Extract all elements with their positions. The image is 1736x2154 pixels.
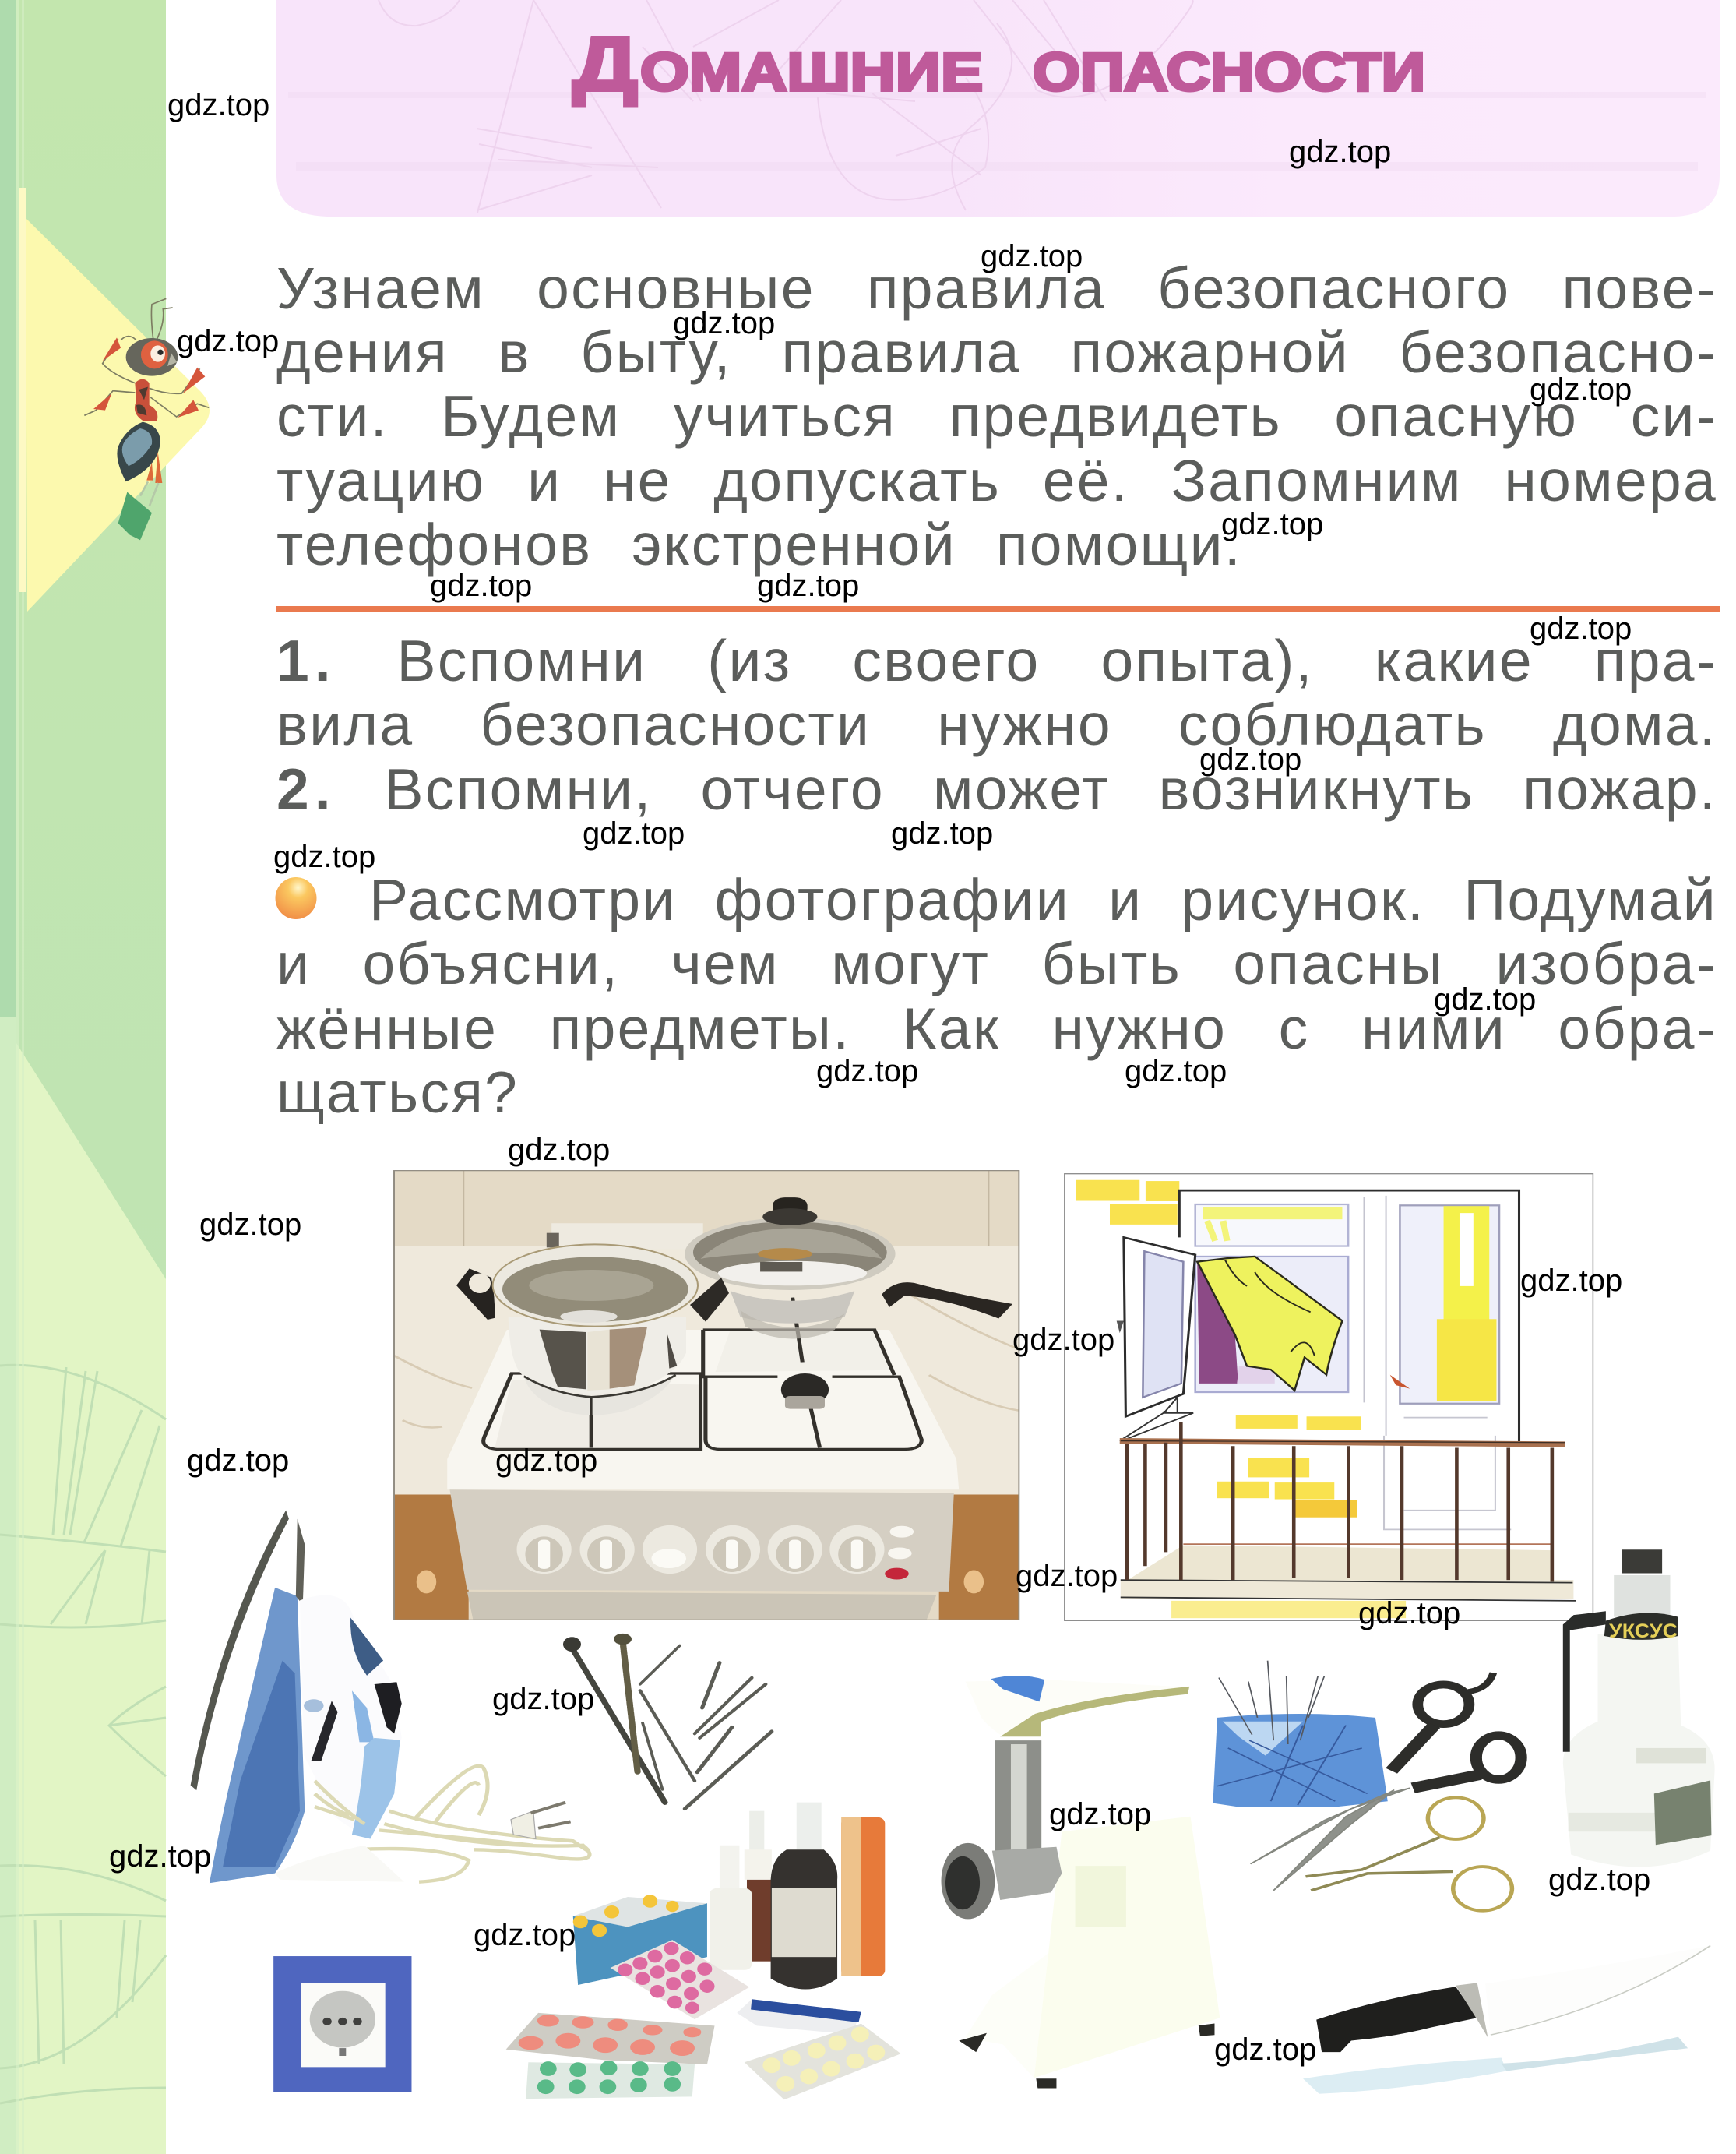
watermarks: gdz.top — [1548, 1863, 1650, 1897]
watermarks: gdz.top — [1016, 1559, 1118, 1593]
questions 1 and 2 — [276, 628, 1717, 822]
watermarks: gdz.top — [1358, 1596, 1460, 1630]
watermarks: gdz.top — [167, 88, 269, 122]
text: щаться? — [276, 1059, 519, 1125]
yellow triangle tab — [19, 188, 210, 612]
watermarks: gdz.top — [583, 816, 685, 851]
watermarks: gdz.top — [1530, 372, 1632, 407]
intro text block — [276, 256, 1717, 577]
text: Рассмотри фотографии и рисунок. Подумай — [369, 867, 1717, 932]
watermarks: gdz.top — [430, 569, 532, 603]
watermarks: gdz.top — [1199, 742, 1301, 777]
watermarks: gdz.top — [187, 1444, 289, 1478]
icon: ant mascot — [84, 298, 209, 540]
pink title banner — [276, 0, 1720, 217]
watermarks: gdz.top — [508, 1133, 610, 1167]
title: home dangers: Д — [572, 21, 638, 107]
watermarks: gdz.top — [109, 1839, 211, 1874]
text: вила безопасности нужно соблюдать дома. — [276, 692, 1717, 757]
watermarks: gdz.top — [816, 1054, 918, 1088]
photo: electric iron with cord — [191, 1511, 590, 1883]
text: туацию и не допускать её. Запомним номера — [276, 448, 1717, 513]
photo: scissors — [1251, 1673, 1521, 1911]
photo: pincushion with pins — [1213, 1661, 1388, 1807]
watermarks: gdz.top — [891, 816, 993, 851]
watermarks: gdz.top — [1530, 612, 1632, 646]
text: 1. Вспомни (из своего опыта), какие пра- — [276, 628, 1717, 693]
watermarks: gdz.top — [1289, 135, 1391, 169]
text: Узнаем основные правила безопасного пове- — [276, 256, 1717, 321]
watermarks: gdz.top — [1012, 1323, 1114, 1357]
task text — [276, 867, 1717, 1125]
watermarks: gdz.top — [757, 569, 859, 603]
text: и объясни, чем могут быть опасны изобра- — [276, 931, 1717, 996]
photo: gas stove with pots — [394, 1171, 1019, 1620]
watermarks: gdz.top — [492, 1682, 594, 1716]
watermarks: gdz.top — [981, 239, 1083, 273]
watermarks: gdz.top — [1214, 2032, 1316, 2067]
watermarks: gdz.top — [474, 1918, 576, 1952]
photo: vinegar bottle — [1563, 1549, 1715, 1867]
text: дения в быту, правила пожарной безопасно- — [276, 319, 1717, 385]
watermarks: gdz.top — [673, 306, 775, 340]
watermarks: gdz.top — [495, 1444, 597, 1478]
label: vinegar: УКСУС — [1609, 1620, 1678, 1642]
text: телефонов экстренной помощи. — [276, 512, 1242, 577]
photo: kitchen knife and table knife — [1303, 1946, 1710, 2094]
photo: meat grinder — [941, 1676, 1220, 2088]
photo: nails and screws — [563, 1634, 772, 1809]
watermarks: gdz.top — [199, 1207, 301, 1242]
text: сти. Будем учиться предвидеть опасную си- — [276, 383, 1717, 449]
watermarks: gdz.top — [273, 840, 375, 874]
divider line — [276, 606, 1720, 612]
watermarks: gdz.top — [177, 324, 279, 358]
icon: orange ball — [276, 877, 316, 919]
green side strip — [0, 0, 166, 2154]
photo: power socket — [273, 1956, 411, 2092]
text: жённые предметы. Как нужно с ними обра- — [276, 996, 1717, 1061]
watermarks: gdz.top — [1520, 1264, 1622, 1298]
photo: medicines and pills — [506, 1803, 901, 2099]
title: home dangers — [572, 21, 1425, 107]
title: home dangers: ОПАСНОСТИ — [1033, 42, 1425, 102]
watermarks: gdz.top — [1434, 982, 1536, 1017]
watermarks: gdz.top — [1221, 507, 1323, 541]
watermarks: gdz.top — [1049, 1797, 1151, 1831]
title: home dangers: ОМАШНИЕ — [640, 42, 983, 102]
watermarks: gdz.top — [1125, 1054, 1227, 1088]
text: 2. Вспомни, отчего может возникнуть пожар. — [276, 756, 1717, 822]
drawing: open window and balcony — [1065, 1174, 1593, 1620]
